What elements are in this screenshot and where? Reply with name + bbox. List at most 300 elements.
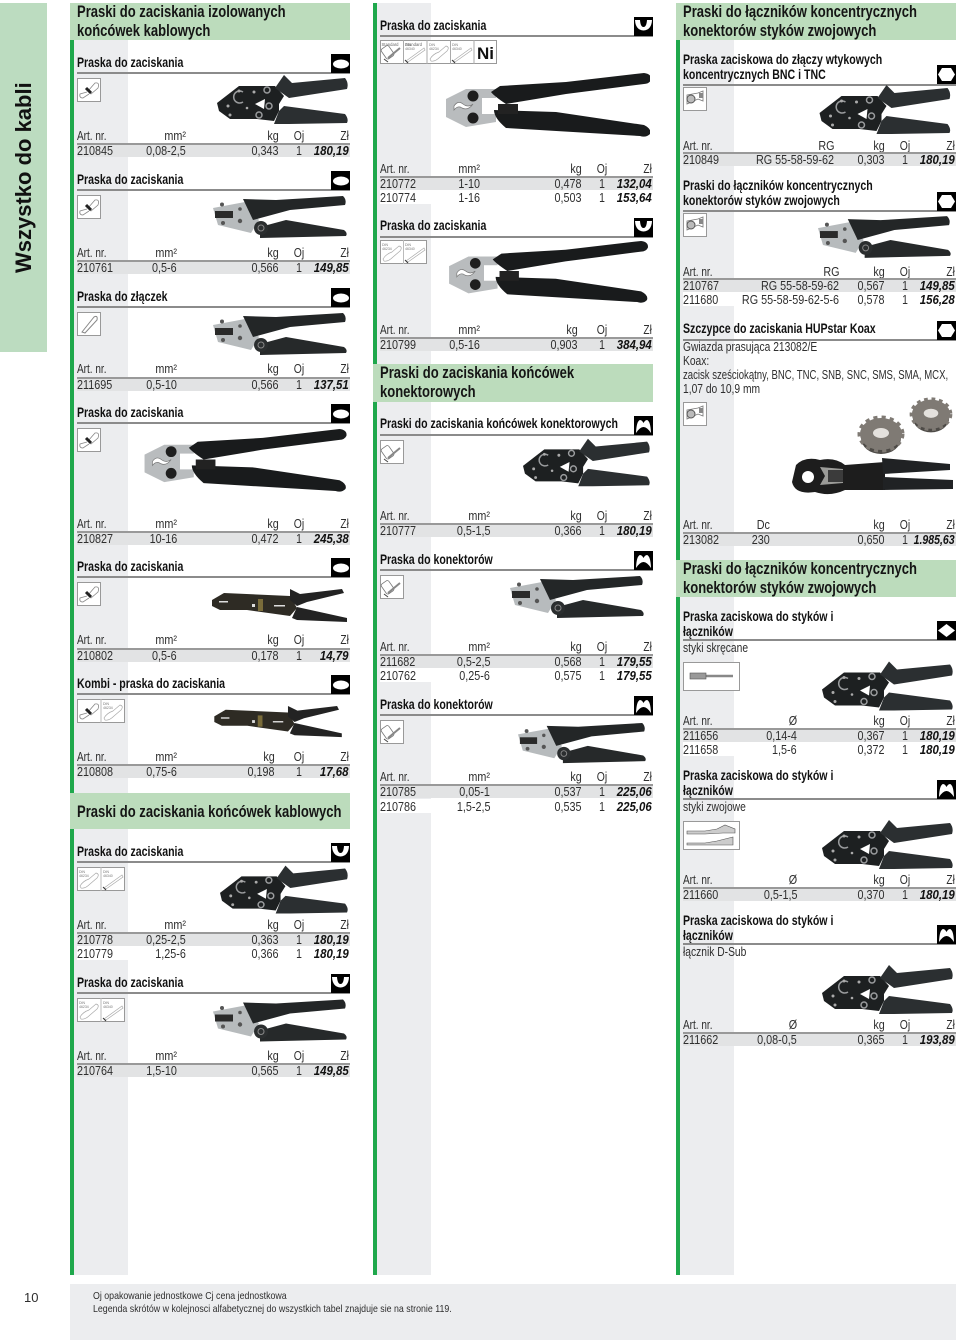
table: kg [571, 769, 582, 784]
crimping tool [214, 706, 342, 738]
crimp dies [856, 396, 956, 464]
icon: crimp profile [634, 17, 653, 36]
product: 211695: Praska do złączek [77, 288, 167, 304]
description [683, 340, 956, 396]
table: 180,19 [314, 143, 349, 158]
icon: crimp profile [937, 321, 956, 340]
table: 1 [296, 1063, 302, 1078]
product: 210761: Praska do zaciskania [77, 171, 183, 187]
table: Art. nr. [77, 749, 106, 764]
description: 1,07 do 10,9 mm [683, 381, 760, 396]
table: 0,198 [248, 764, 275, 779]
pictogram [77, 867, 125, 891]
table: 1 [599, 668, 605, 683]
crimping tool [822, 965, 953, 1015]
description: zacisk sześciokątny, BNC, TNC, SNB, SNC, SMS, SMA, MCX, [683, 367, 948, 382]
table: 0,372 [858, 742, 885, 757]
pictogram row with Ni: Standard [405, 42, 423, 47]
table: kg [567, 322, 578, 337]
table [683, 714, 956, 756]
product: 210849 [683, 51, 956, 166]
table: Zł [644, 769, 652, 784]
table: 1 [296, 260, 302, 275]
table: 210786 [380, 799, 416, 814]
table: 0,365 [858, 1032, 885, 1047]
table: Oj [294, 516, 304, 531]
table: RG 55-58-59-62-5-6 [742, 292, 839, 307]
table: Oj [294, 917, 304, 932]
table: kg [268, 632, 279, 647]
table: 0,08-2,5 [146, 143, 186, 158]
table: Zł [947, 713, 955, 728]
table: 0,370 [858, 887, 885, 902]
table [380, 640, 653, 682]
pictogram [683, 402, 707, 426]
table: 193,89 [920, 1032, 955, 1047]
table: 0,903 [551, 337, 578, 352]
table: 0,75-6 [146, 764, 177, 779]
product: 211660: Praska zaciskowa do styków i [683, 767, 833, 783]
icon: crimp profile [937, 192, 956, 211]
table: 213082 [683, 532, 719, 547]
pictogram row with Ni: Standard [382, 42, 399, 47]
table: 0,567 [858, 278, 885, 293]
table: Oj [900, 713, 910, 728]
table: Zł [947, 264, 955, 279]
table [77, 749, 350, 779]
table: 180,19 [920, 742, 955, 757]
product: 211662 [683, 912, 956, 1046]
table: 210764 [77, 1063, 113, 1078]
table: Oj [597, 322, 607, 337]
table: Zł [947, 517, 955, 532]
table: 1 [902, 532, 908, 547]
section heading [373, 364, 653, 402]
table: kg [571, 639, 582, 654]
product: 211662: łączników [683, 927, 733, 943]
table: 384,94 [617, 337, 652, 352]
table: Zł [947, 138, 955, 153]
table: 1,25-6 [155, 946, 186, 961]
product: 211656: łączników [683, 623, 733, 639]
table: Art. nr. [77, 632, 106, 647]
product: 210802 [77, 558, 350, 663]
table: Zł [341, 245, 349, 260]
table: kg [874, 872, 885, 887]
table: 1 [902, 1032, 908, 1047]
table: kg [874, 517, 885, 532]
table: 180,19 [920, 152, 955, 167]
table: Art. nr. [77, 245, 106, 260]
pictogram [380, 575, 404, 599]
product: 210777: Praski do zaciskania końcówek konektorowych [380, 415, 618, 431]
product: 211660: łączników [683, 782, 733, 798]
table: 1 [902, 278, 908, 293]
table: Art. nr. [683, 713, 712, 728]
crimping tool [523, 438, 650, 488]
icon: crimp profile [634, 218, 653, 237]
table [380, 770, 653, 813]
table: mm² [458, 322, 480, 337]
pictogram [77, 582, 101, 606]
table [683, 139, 956, 166]
table: 0,5-1,5 [456, 523, 490, 538]
table: 1 [296, 531, 302, 546]
table: 210762 [380, 668, 416, 683]
table: 1 [902, 742, 908, 757]
section heading: konektorów styków zwojowych [683, 578, 876, 596]
pictogram row with Ni: Ni [477, 44, 494, 63]
table: 210774 [380, 190, 416, 205]
product: 210761 [77, 171, 350, 275]
table: Art. nr. [683, 138, 712, 153]
pictogram [77, 312, 101, 336]
table [380, 162, 653, 204]
pictogram [77, 699, 125, 723]
pictogram row with Ni [380, 40, 497, 64]
table: 149,85 [920, 278, 955, 293]
table: Art. nr. [77, 128, 106, 143]
table: kg [571, 508, 582, 523]
pictogram [77, 998, 125, 1022]
table: 0,25-6 [459, 668, 490, 683]
table: Art. nr. [380, 639, 409, 654]
table: 0,363 [252, 932, 279, 947]
table: 1 [296, 648, 302, 663]
product: 210845: Praska do zaciskania [77, 54, 183, 70]
table: Art. nr. [380, 322, 409, 337]
table: 210808 [77, 764, 113, 779]
table: Zł [644, 639, 652, 654]
table: mm² [164, 917, 186, 932]
product: 210827 [77, 404, 350, 546]
table: Zł [341, 361, 349, 376]
table: Oj [597, 769, 607, 784]
table: 0,472 [252, 531, 279, 546]
product: 210808 [77, 675, 350, 779]
table: Art. nr. [683, 1017, 712, 1032]
icon: crimp profile [937, 621, 956, 640]
table: 1 [599, 784, 605, 799]
crimping tool [212, 589, 347, 622]
table: kg [874, 138, 885, 153]
section heading [70, 793, 350, 829]
crimping tool [446, 72, 650, 138]
footer legend [70, 1284, 956, 1340]
crimping tool [446, 240, 650, 304]
table: 1 [599, 176, 605, 191]
product: 211682 [380, 551, 653, 682]
crimping tool [213, 313, 347, 355]
table: Oj [294, 1048, 304, 1063]
table: Ø [789, 713, 797, 728]
table: 0,566 [252, 377, 279, 392]
table: mm² [468, 769, 490, 784]
page number: 10 [24, 1290, 38, 1305]
table: 210778 [77, 932, 113, 947]
table: mm² [468, 508, 490, 523]
product: 210827: Praska do zaciskania [77, 404, 183, 420]
table: 0,367 [858, 728, 885, 743]
icon: crimp profile [331, 558, 350, 577]
description: Koax: [683, 353, 709, 368]
crimping tool [822, 820, 953, 870]
table: 1 [902, 152, 908, 167]
table: 153,64 [617, 190, 652, 205]
icon: crimp profile [331, 675, 350, 694]
icon: crimp profile [937, 780, 956, 799]
icon: crimp profile [634, 551, 653, 570]
table: 210785 [380, 784, 416, 799]
table: 1-16 [458, 190, 480, 205]
table: Art. nr. [683, 517, 712, 532]
product: 210772 [380, 17, 653, 204]
table [77, 245, 350, 275]
table: 1 [599, 654, 605, 669]
table: 211682 [380, 654, 415, 669]
footer legend: Legenda skrótów w kolejnosci alfabetycznej do wszystkich tabel znajduje sie na stronie 119. [93, 1302, 452, 1314]
table: Zł [644, 161, 652, 176]
table: 0,25-2,5 [146, 932, 186, 947]
table: Zł [644, 322, 652, 337]
product: 210767: konektorów styków zwojowych [683, 192, 840, 208]
column 1 heading: końcówek kablowych [77, 22, 210, 40]
table: 1,5-10 [146, 1063, 177, 1078]
table: Oj [900, 138, 910, 153]
table: 210777 [380, 523, 416, 538]
table: Zł [341, 632, 349, 647]
table: 1 [902, 292, 908, 307]
product: 210767: Praski do łączników koncentrycznych [683, 177, 873, 193]
table: 179,55 [617, 668, 652, 683]
table: 210767 [683, 278, 719, 293]
table: 0,178 [252, 648, 279, 663]
table: Zł [947, 872, 955, 887]
icon: crimp profile [331, 288, 350, 307]
icon: crimp profile [634, 416, 653, 435]
table: Ø [789, 872, 797, 887]
icon: crimp profile [634, 696, 653, 715]
table: 156,28 [920, 292, 955, 307]
table: 210772 [380, 176, 416, 191]
crimping tool [822, 661, 953, 712]
table: Zł [341, 1048, 349, 1063]
product: 211656 [683, 608, 956, 756]
table: 0,5-10 [146, 377, 177, 392]
pictogram [683, 213, 707, 237]
table: 0,478 [555, 176, 582, 191]
table: 0,566 [252, 260, 279, 275]
table: 230 [752, 532, 770, 547]
icon: crimp profile [331, 54, 350, 73]
product: 210849: koncentrycznych BNC i TNC [683, 66, 826, 82]
table [77, 361, 350, 392]
table: 211656 [683, 728, 718, 743]
table: 210761 [77, 260, 113, 275]
table: 210827 [77, 531, 113, 546]
table: kg [571, 161, 582, 176]
column 3 heading: konektorów styków zwojowych [683, 22, 876, 40]
table: 149,85 [314, 1063, 349, 1078]
pictogram [380, 440, 404, 464]
table: kg [268, 516, 279, 531]
table: Oj [294, 128, 304, 143]
product: 210785: Praska do konektorów [380, 696, 493, 712]
table: 180,19 [314, 932, 349, 947]
table: RG [818, 138, 834, 153]
crimping tool [818, 85, 952, 135]
table: 0,5-2,5 [456, 654, 490, 669]
table: 1 [599, 523, 605, 538]
table: 210802 [77, 648, 113, 663]
table [683, 873, 956, 901]
table: Oj [900, 264, 910, 279]
icon: crimp profile [331, 843, 350, 862]
table: mm² [468, 639, 490, 654]
table: Oj [597, 508, 607, 523]
product: 213082: Szczypce do zaciskania HUPstar Koax [683, 320, 876, 336]
table: 225,06 [617, 799, 652, 814]
table: 180,19 [617, 523, 652, 538]
table: 1 [902, 728, 908, 743]
icon: crimp profile [937, 65, 956, 84]
section heading: Praski do zaciskania końcówek [380, 364, 574, 382]
table: 137,51 [314, 377, 349, 392]
table: 0,5-1,5 [763, 887, 797, 902]
product: 211662: Praska zaciskowa do styków i [683, 912, 833, 928]
table: Zł [341, 128, 349, 143]
table: Oj [597, 161, 607, 176]
table: 0,366 [555, 523, 582, 538]
table: kg [268, 361, 279, 376]
table: Oj [294, 749, 304, 764]
product: 211660 [683, 767, 956, 901]
product: 210767 [683, 177, 956, 306]
table: 180,19 [920, 887, 955, 902]
table: 0,5-6 [152, 648, 177, 663]
table: 10-16 [149, 531, 177, 546]
pictogram [77, 195, 101, 219]
table: RG [823, 264, 839, 279]
description: styki zwojowe [683, 799, 746, 814]
crimping tool [220, 866, 348, 914]
sidebar tab: Wszystko do kabli [11, 82, 36, 273]
table: 1 [599, 799, 605, 814]
table: 225,06 [617, 784, 652, 799]
table: 210849 [683, 152, 719, 167]
icon: crimp profile [331, 404, 350, 423]
table: RG 55-58-59-62 [756, 152, 834, 167]
description: łącznik D-Sub [683, 944, 746, 959]
pictogram [380, 720, 404, 744]
table: mm² [458, 161, 480, 176]
table: 245,38 [314, 531, 349, 546]
table: 1 [296, 932, 302, 947]
table [380, 509, 653, 537]
table: kg [874, 1017, 885, 1032]
crimping tool [505, 575, 650, 620]
table: Oj [900, 872, 910, 887]
table: 180,19 [920, 728, 955, 743]
crimping tool [515, 722, 650, 765]
table: 1 [296, 143, 302, 158]
product: 210764 [77, 974, 350, 1078]
crimping tool [217, 75, 348, 124]
table: 0,568 [555, 654, 582, 669]
product: 210849: Praska zaciskowa do złączy wtykowych [683, 51, 882, 67]
table: Art. nr. [380, 508, 409, 523]
table: Art. nr. [683, 872, 712, 887]
table: mm² [155, 632, 177, 647]
table [683, 518, 956, 546]
product: 211656: Praska zaciskowa do styków i [683, 608, 833, 624]
table: 0,537 [555, 784, 582, 799]
table: 0,5-6 [152, 260, 177, 275]
table: 1 [296, 764, 302, 779]
product: 210799 [380, 217, 653, 351]
table: 1,5-2,5 [456, 799, 490, 814]
table: mm² [155, 516, 177, 531]
column 1 heading [70, 3, 350, 40]
table: Art. nr. [380, 769, 409, 784]
table: 0,565 [252, 1063, 279, 1078]
table [77, 1048, 350, 1078]
section heading: konektorowych [380, 382, 476, 400]
table: Dc [757, 517, 770, 532]
table: Art. nr. [683, 264, 712, 279]
table [683, 265, 956, 306]
product: 211695 [77, 288, 350, 392]
column 3 heading: Praski do łączników koncentrycznych [683, 3, 917, 21]
table [77, 632, 350, 663]
footer legend: Oj opakowanie jednostkowe Cj cena jednostkowa [93, 1290, 287, 1302]
table: 210799 [380, 337, 416, 352]
table: 1 [599, 190, 605, 205]
table: 132,04 [617, 176, 652, 191]
table: Zł [341, 917, 349, 932]
table: 0,575 [555, 668, 582, 683]
description: styki skręcane [683, 640, 748, 655]
table: 0,14-4 [766, 728, 797, 743]
pictogram [77, 428, 101, 452]
product: 210799: Praska do zaciskania [380, 217, 486, 233]
table: Oj [294, 361, 304, 376]
table: 1.985,63 [914, 532, 955, 547]
table: Zł [341, 749, 349, 764]
table: 0,343 [252, 143, 279, 158]
table [77, 917, 350, 961]
table: 179,55 [617, 654, 652, 669]
product: 210785 [380, 696, 653, 813]
table: Art. nr. [77, 516, 106, 531]
table: 1 [902, 887, 908, 902]
table: Art. nr. [77, 917, 106, 932]
table: kg [874, 264, 885, 279]
pictogram [77, 78, 101, 102]
table: kg [268, 128, 279, 143]
table: 211695 [77, 377, 112, 392]
product: 213082 [683, 320, 956, 546]
table: Oj [294, 632, 304, 647]
table: 210779 [77, 946, 113, 961]
column 3 heading [676, 3, 956, 40]
table: kg [264, 749, 275, 764]
table: 0,366 [252, 946, 279, 961]
table: 0,535 [555, 799, 582, 814]
product: 210778 [77, 843, 350, 961]
table: Oj [294, 245, 304, 260]
crimping tool [818, 215, 952, 260]
